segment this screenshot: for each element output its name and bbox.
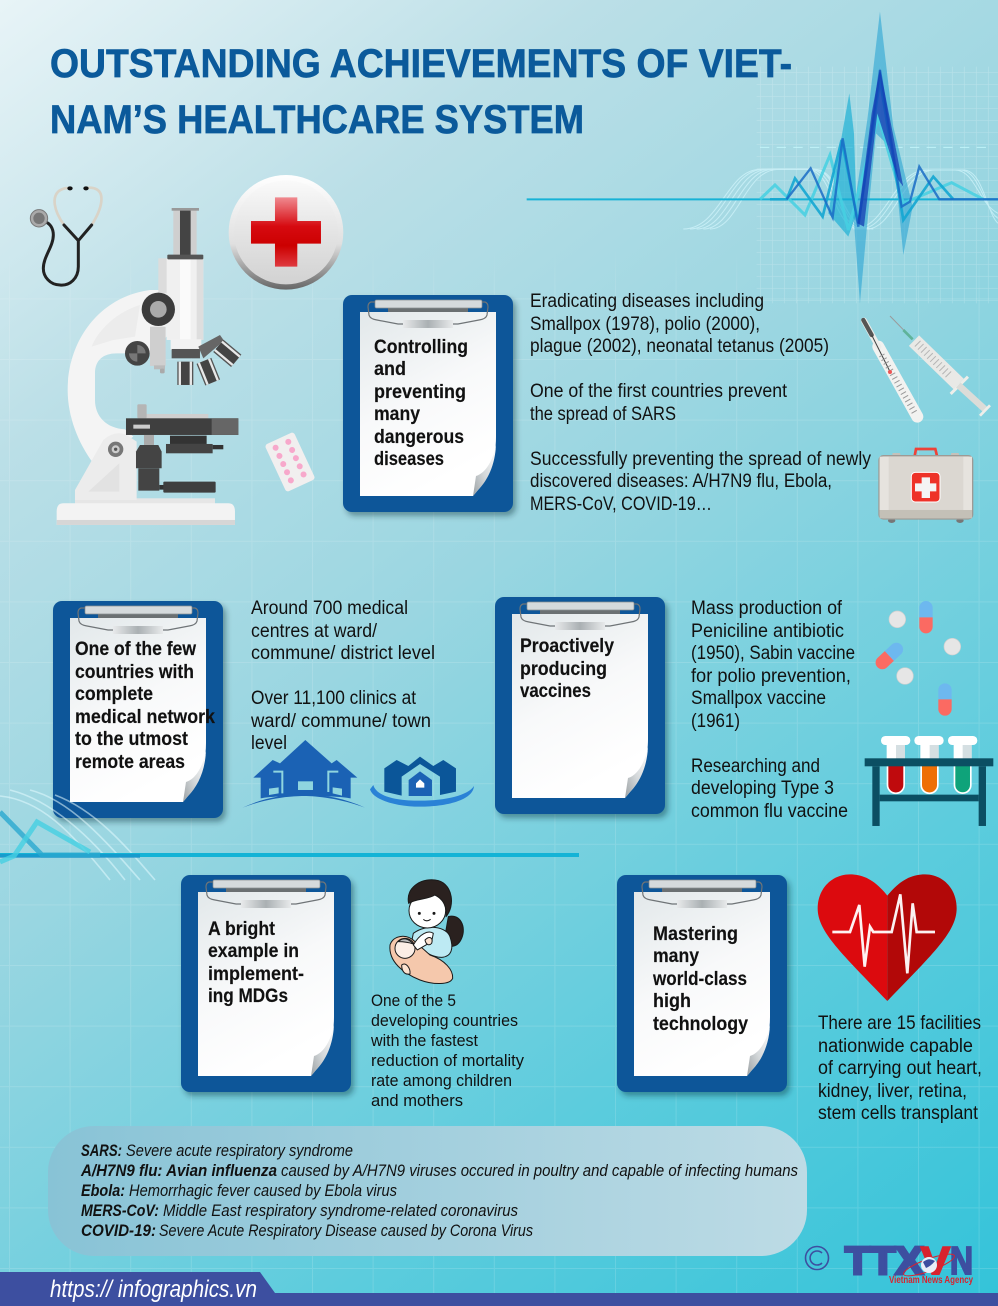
clipboard 1 heading: many [374, 404, 420, 425]
panel: technology [617, 875, 982, 1124]
clipboard 2 heading: complete [75, 684, 153, 705]
icon: large house [243, 740, 365, 808]
medical network text: commune/ district level [251, 643, 435, 664]
clipboard 2 heading: remote areas [75, 752, 185, 773]
icon: red cross button [229, 175, 343, 290]
clipboard 2 heading: countries with [75, 662, 194, 683]
clipboard 1 heading: Controlling [374, 337, 468, 358]
clipboard 2 [53, 601, 223, 818]
icon: pill blister [265, 432, 315, 492]
MDG text: One of the 5 [371, 992, 456, 1010]
clipboard 5 heading: many [653, 946, 699, 967]
clipboard 4 heading: implement- [208, 964, 304, 985]
icon: pills [873, 601, 961, 716]
technology text: kidney, liver, retina, [818, 1081, 967, 1102]
clipboard 1 [343, 295, 513, 512]
clipboard 3 heading: producing [520, 659, 607, 680]
footer bar [0, 1272, 998, 1306]
medical network text: ward/ commune/ town [250, 711, 431, 732]
clipboard 1 heading: dangerous [374, 427, 464, 448]
clipboard 3 heading: Proactively [520, 636, 614, 657]
icon: mother feeding baby [390, 880, 463, 984]
medical network text: level [251, 733, 287, 754]
icon: stethoscope [30, 186, 101, 285]
logo: TTXVN: V [921, 1240, 950, 1283]
title: OUTSTANDING ACHIEVEMENTS OF VIET- [50, 42, 792, 86]
MDG text: and mothers [371, 1092, 463, 1110]
technology text: stem cells transplant [818, 1103, 979, 1124]
heartbeat graphic mid left [0, 790, 579, 880]
footnote panel: A/H7N9 flu: Avian influenza [80, 1162, 277, 1180]
panel: MDGs [181, 875, 525, 1110]
icon: syringe [890, 316, 990, 416]
title [50, 42, 792, 142]
clipboard 4 heading: example in [208, 941, 299, 962]
medical network text [250, 598, 435, 754]
clipboard 5 heading: high [653, 991, 691, 1012]
logo: TTXVN: TTX [845, 1240, 923, 1283]
disease control text [530, 291, 871, 515]
vaccine text: for polio prevention, [691, 666, 851, 687]
vaccine text: Peniciline antibiotic [691, 621, 844, 642]
vaccine text [691, 598, 855, 822]
vaccine text: Smallpox vaccine [691, 688, 826, 709]
vaccine text: (1950), Sabin vaccine [691, 643, 855, 664]
clipboard 2 heading [75, 639, 215, 773]
disease control text: Smallpox (1978), polio (2000), [530, 314, 760, 335]
vaccine text: common flu vaccine [691, 801, 848, 822]
clipboard 1 heading: preventing [374, 382, 466, 403]
technology text [818, 1013, 982, 1124]
panel: vaccines [495, 597, 855, 822]
clipboard 4 heading: A bright [208, 919, 276, 940]
technology text: There are 15 facilities [818, 1013, 981, 1034]
icon: thermometer [863, 320, 917, 417]
clipboard 2 heading: One of the few [75, 639, 196, 660]
technology text: of carrying out heart, [818, 1058, 982, 1079]
vaccine text: developing Type 3 [691, 778, 834, 799]
clipboard 4 [181, 875, 351, 1092]
medical network text: Around 700 medical [251, 598, 408, 619]
footnote panel: Middle East respiratory syndrome-related coronavirus [163, 1202, 518, 1220]
clipboard 2 heading: medical network [75, 707, 215, 728]
MDG text: reduction of mortality [371, 1052, 525, 1070]
disease control text: MERS-CoV, COVID-19… [530, 494, 712, 515]
technology text: nationwide capable [818, 1036, 973, 1057]
clipboard 2 heading: to the utmost [75, 729, 189, 750]
title: NAM’S HEALTHCARE SYSTEM [50, 98, 584, 142]
MDG text: rate among children [371, 1072, 512, 1090]
icon: microscope [57, 208, 241, 525]
disease control text: discovered diseases: A/H7N9 flu, Ebola, [530, 471, 832, 492]
clipboard 3 heading [520, 636, 614, 702]
vaccine text: Mass production of [691, 598, 843, 619]
clipboard 1 heading: and [374, 359, 406, 380]
clipboard 1 heading [374, 337, 468, 470]
clipboard 4 heading [208, 919, 304, 1007]
clipboard 5 heading: Mastering [653, 924, 738, 945]
clipboard 1 heading: diseases [374, 449, 444, 470]
clipboard 5 heading: world-class [652, 969, 747, 990]
panel: medical network [53, 598, 435, 818]
MDG text: with the fastest [370, 1032, 478, 1050]
footnote panel: Hemorrhagic fever caused by Ebola virus [129, 1182, 397, 1200]
footnote panel: MERS-CoV: [81, 1202, 159, 1220]
clipboard 5 [617, 875, 787, 1092]
footnote panel [48, 1126, 807, 1256]
footer bar: https:// infographics.vn [50, 1276, 257, 1303]
heartbeat graphic top right [527, 12, 998, 303]
icon: test tubes [865, 736, 993, 826]
clipboard 3 [495, 597, 665, 814]
MDG text [370, 992, 525, 1110]
medical network text: Over 11,100 clinics at [251, 688, 417, 709]
footnote panel: Severe Acute Respiratory Disease caused by Corona Virus [159, 1222, 533, 1240]
MDG text: developing countries [371, 1012, 518, 1030]
logo: TTXVN: Vietnam News Agency [889, 1275, 973, 1286]
footnote panel: Ebola: [81, 1182, 125, 1200]
clipboard 5 heading: technology [653, 1014, 748, 1035]
panel: controlling diseases [343, 291, 871, 515]
vaccine text: (1961) [691, 711, 740, 732]
disease control text: plague (2002), neonatal tetanus (2005) [530, 336, 829, 357]
disease control text: One of the first countries prevent [530, 381, 788, 402]
clipboard 3 heading: vaccines [520, 681, 591, 702]
footnote panel: SARS: [81, 1142, 122, 1160]
logo: TTXVN [845, 1240, 973, 1286]
icon: heart [818, 874, 957, 1001]
copyright symbol [806, 1246, 828, 1270]
footnote panel: caused by A/H7N9 viruses occured in poultry and capable of infecting humans [281, 1162, 798, 1180]
disease control text: Eradicating diseases including [530, 291, 764, 312]
logo: TTXVN: N [950, 1240, 973, 1283]
icon: small house on ring [370, 757, 474, 807]
medical network text: centres at ward/ [251, 621, 378, 642]
vaccine text: Researching and [691, 756, 820, 777]
disease control text: the spread of SARS [530, 404, 676, 425]
footnote panel: Severe acute respiratory syndrome [126, 1142, 353, 1160]
disease control text: Successfully preventing the spread of newly [530, 449, 871, 470]
clipboard 5 heading [652, 924, 748, 1035]
footnote panel: COVID-19: [81, 1222, 156, 1240]
icon: first aid kit [879, 449, 973, 523]
clipboard 4 heading: ing MDGs [208, 986, 288, 1007]
